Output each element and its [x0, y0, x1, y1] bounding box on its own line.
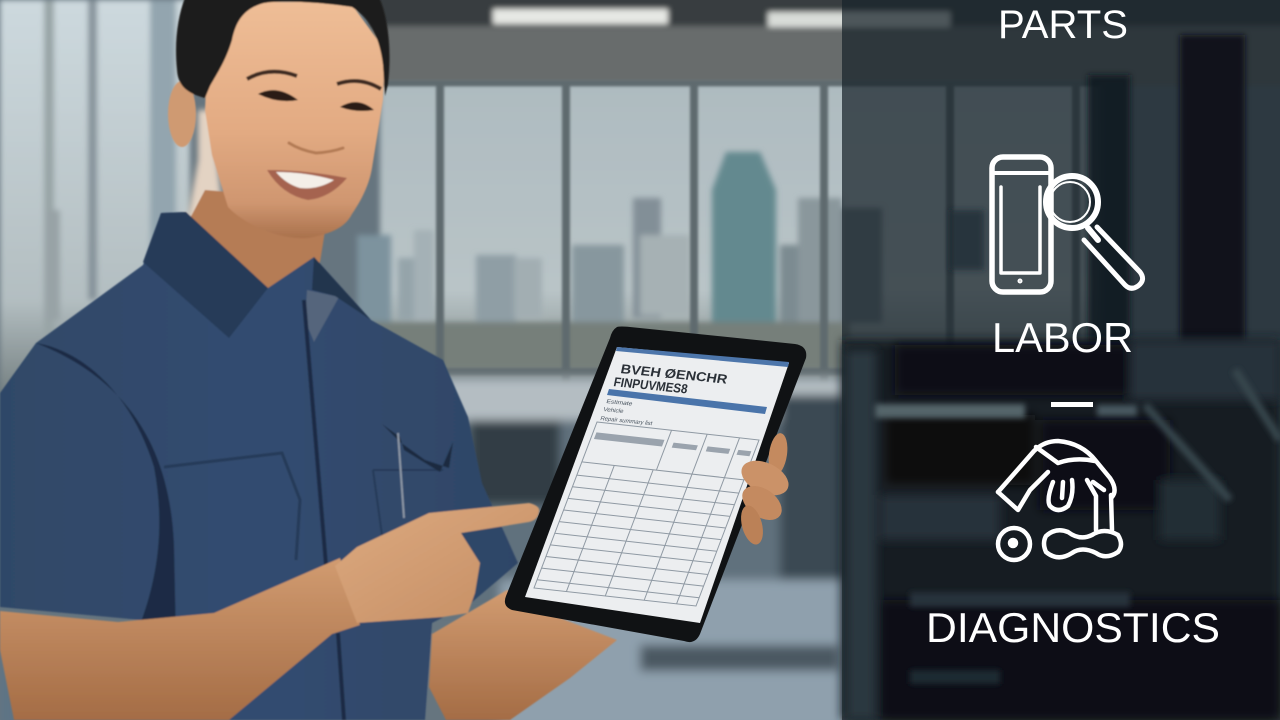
tablet [505, 326, 806, 642]
face [205, 2, 385, 238]
window mullions [380, 80, 1100, 384]
small document lines: Vehicle [602, 407, 625, 415]
small document lines [599, 399, 653, 427]
tablet body [505, 326, 806, 642]
shirt [0, 212, 518, 720]
placket [304, 300, 344, 720]
screen header stripe [616, 347, 789, 367]
office floor and machinery [0, 378, 860, 720]
pale patch beside face [186, 110, 222, 228]
label: parts: PARTS [998, 3, 1128, 47]
left forearm [0, 558, 360, 720]
dash separator [1051, 402, 1093, 407]
eyes [247, 72, 381, 111]
icon: diagnostics [998, 441, 1121, 560]
teeth [276, 172, 334, 188]
skyline [350, 152, 882, 370]
tablet screen [525, 347, 789, 623]
ceiling [370, 0, 1280, 86]
city windows [380, 84, 1100, 379]
document title: BVEH ØENCHR [619, 361, 730, 387]
dark columns and car silhouette [842, 35, 1280, 720]
right chest pocket [373, 424, 453, 535]
holding hand [736, 432, 794, 547]
ear [168, 81, 196, 147]
label: labor: LABOR [992, 314, 1133, 361]
smile [267, 170, 347, 200]
person: mechanic [0, 0, 617, 720]
icon: phone with magnifying glass [992, 157, 1143, 292]
right forearm [429, 590, 617, 720]
document title [612, 361, 730, 396]
panel: dark right overlay [842, 0, 1280, 720]
collar [143, 212, 268, 338]
hair [176, 0, 390, 98]
open neck inner [305, 290, 339, 342]
neck [188, 190, 330, 290]
estimate table [534, 422, 759, 606]
pointing hand [335, 503, 539, 623]
nose [289, 143, 343, 153]
left windows [0, 0, 190, 400]
document title: FINPUVMES8 [612, 374, 689, 396]
sleeve seam shadow [36, 343, 176, 640]
label: diagnostics: DIAGNOSTICS [926, 604, 1220, 651]
blue rule [607, 389, 767, 414]
small document lines: Repair summary list [599, 416, 653, 427]
left chest pocket [164, 453, 300, 560]
small document lines: Estimate [605, 399, 634, 408]
collar right flap [312, 257, 371, 320]
